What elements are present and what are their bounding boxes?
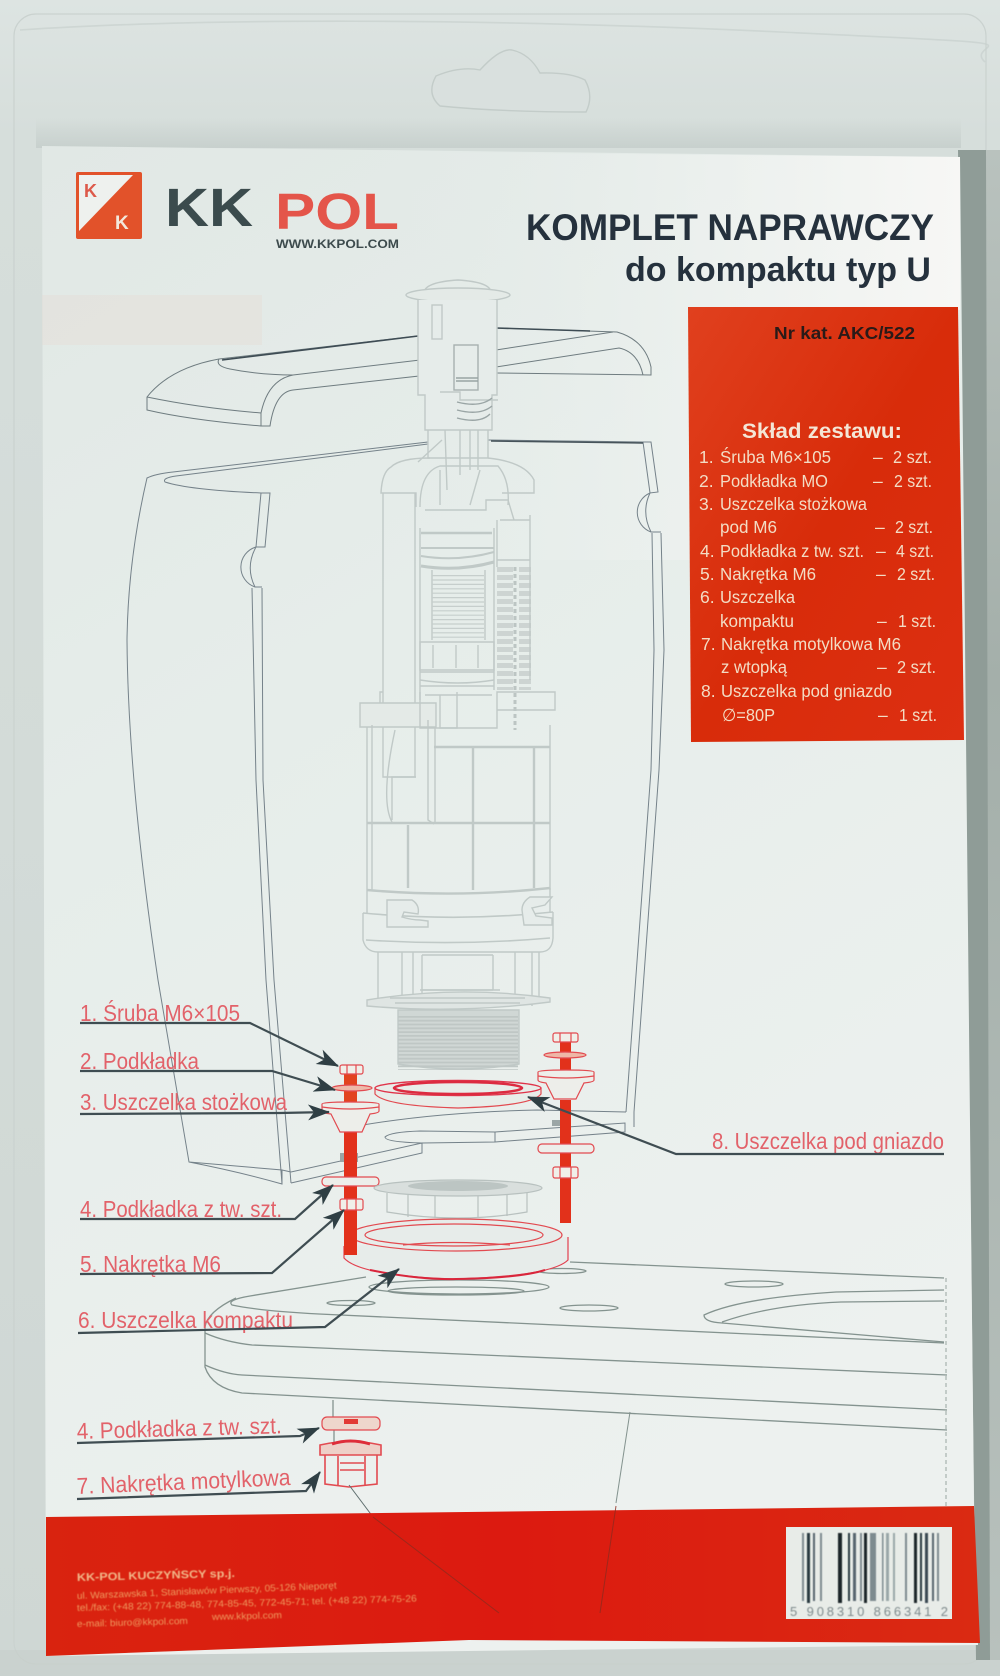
threaded outlet (398, 1010, 519, 1070)
valve shell (381, 440, 534, 777)
catalog number: Nr kat. AKC/522 (774, 323, 915, 343)
valve lower band with clips (363, 888, 553, 952)
label 8: 8. Uszczelka pod gniazdo (712, 1128, 944, 1154)
valve button (406, 280, 510, 490)
gasket 6 (344, 1219, 568, 1279)
label 3: 3. Uszczelka stożkowa (80, 1089, 287, 1115)
hanger tab embossed in the plastic (432, 50, 590, 112)
label 6: 6. Uszczelka kompaktu (78, 1307, 293, 1333)
label 7: 7. Nakrętka motylkowa (76, 1464, 291, 1499)
list items: 4 szt. (896, 541, 934, 561)
label 2 (80, 1048, 335, 1090)
list items: 8. (701, 681, 716, 701)
part labels (76, 999, 944, 1499)
logo (76, 172, 399, 251)
label 1: 1. Śruba M6×105 (80, 999, 240, 1026)
list items: – (877, 611, 887, 631)
bottom washer (322, 1417, 380, 1430)
list items: Nakrętka M6 (720, 564, 816, 584)
list items: – (878, 705, 888, 725)
website: WWW.KKPOL.COM (276, 239, 399, 251)
company address (77, 1567, 417, 1630)
tank body line drawing (127, 440, 664, 1184)
list items: Podkładka z tw. szt. (720, 541, 864, 561)
logo: POL (275, 183, 399, 240)
logo wordmark: KK (165, 178, 253, 238)
title (526, 207, 934, 289)
company address: ul. Warszawska 1, Stanisławów Pierwszy, 05-126 Nieporęt (77, 1581, 337, 1602)
list items: 4. (700, 541, 715, 561)
valve cage (367, 720, 550, 894)
list items: 1 szt. (898, 611, 936, 631)
barcode (786, 1527, 952, 1619)
valve clamps (360, 692, 555, 728)
left bolt assembly (322, 1065, 379, 1255)
red footer banner (46, 1506, 980, 1656)
list items: – (876, 564, 886, 584)
list heading: Skład zestawu: (742, 419, 902, 443)
right edge plastic band (958, 150, 1000, 1660)
company address: tel./fax: (+48 22) 774-88-48, 774-85-45, 772-45-71; tel. (+48 22) 774-75-26 (77, 1594, 417, 1614)
thin line from wing nut (349, 1485, 373, 1517)
label 6 (78, 1269, 399, 1333)
list items: Uszczelka stożkowa (720, 494, 867, 514)
list items: ∅=80P (722, 705, 775, 725)
grey nut below tank (374, 1180, 542, 1218)
title: do kompaktu typ U (625, 251, 931, 289)
list items: – (873, 471, 883, 491)
label 4: 4. Podkładka z tw. szt. (80, 1196, 282, 1222)
list items: pod M6 (720, 517, 777, 537)
list items: – (875, 517, 885, 537)
label 5 (80, 1210, 344, 1277)
panel: contents list (688, 307, 964, 742)
wing nut (320, 1441, 381, 1487)
label 4 (80, 1185, 333, 1222)
list items: 2 szt. (897, 564, 935, 584)
list items: – (877, 657, 887, 677)
tank lid line drawing (147, 328, 651, 426)
title: KOMPLET NAPRAWCZY (526, 207, 934, 248)
valve bellows (420, 528, 494, 700)
list items: 2 szt. (895, 517, 933, 537)
label 1 (80, 999, 338, 1066)
company address: www.kkpol.com (211, 1610, 282, 1623)
list items: 7. (701, 634, 716, 654)
list items: Uszczelka pod gniazdo (721, 681, 892, 701)
company address: e-mail: biuro@kkpol.com (77, 1616, 188, 1630)
company address: KK-POL KUCZYŃSCY sp.j. (77, 1567, 235, 1584)
list items: 6. (700, 587, 715, 607)
list items: 1. (699, 447, 714, 467)
list items: Nakrętka motylkowa M6 (721, 634, 901, 654)
valve chain column (497, 515, 530, 730)
exploded parts in red (320, 1033, 594, 1487)
seal 8 ring (375, 1080, 541, 1108)
logo mark: K (115, 213, 129, 234)
label 2: 2. Podkładka (80, 1048, 199, 1074)
list items: 2. (699, 471, 714, 491)
list items: – (876, 541, 886, 561)
list items: 1 szt. (899, 705, 937, 725)
label 4 bottom: 4. Podkładka z tw. szt. (76, 1412, 282, 1444)
logo mark (76, 172, 142, 239)
list items: z wtopką (721, 657, 787, 677)
list items: kompaktu (720, 611, 794, 631)
list items: 3. (699, 494, 714, 514)
list items: 2 szt. (897, 657, 936, 677)
flush valve line drawing (360, 280, 555, 1070)
list items: Śruba M6×105 (720, 446, 831, 467)
list items: Podkładka MO (720, 471, 828, 491)
list items: – (873, 447, 883, 467)
label 8 (528, 1097, 944, 1154)
barcode: 5 908310 866341 2 (790, 1604, 948, 1619)
list items (699, 446, 937, 725)
logo mark: K (84, 181, 97, 201)
list items: 5. (700, 564, 715, 584)
right bolt assembly (538, 1033, 594, 1223)
list items: 2 szt. (893, 447, 932, 467)
toilet base line drawing (205, 1262, 947, 1510)
list items: Uszczelka (720, 587, 795, 607)
list items: 2 szt. (894, 471, 932, 491)
label 5: 5. Nakrętka M6 (80, 1251, 221, 1277)
valve legs and flange (367, 952, 550, 1009)
